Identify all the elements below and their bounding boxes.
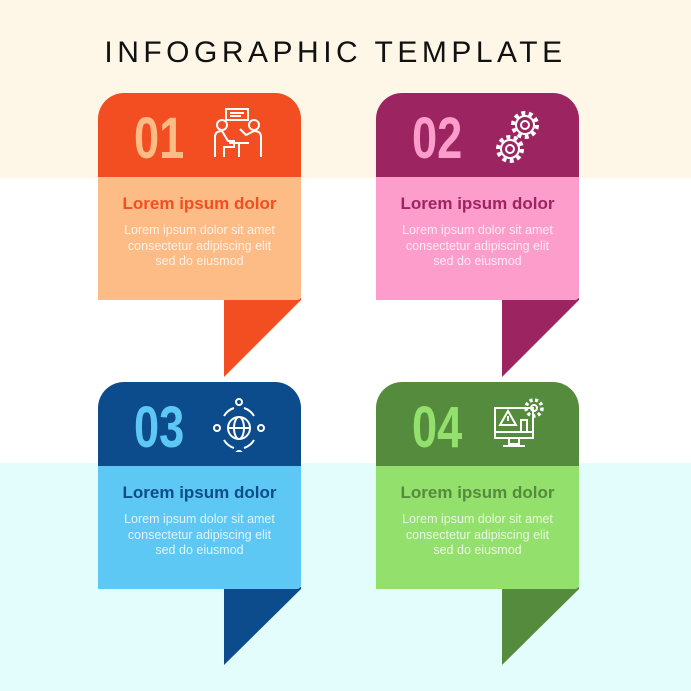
card 3 xyxy=(98,382,301,589)
card 2: consectetur adipiscing elit xyxy=(406,238,549,252)
icon: gears xyxy=(496,111,539,163)
card 1 xyxy=(98,93,301,300)
card 3: consectetur adipiscing elit xyxy=(128,528,271,542)
icon: global network xyxy=(213,398,265,452)
icon: meeting xyxy=(214,108,262,157)
card 2 xyxy=(376,93,579,300)
card 1: consectetur adipiscing elit xyxy=(128,238,271,252)
card 4: consectetur adipiscing elit xyxy=(406,528,549,542)
card 1: Lorem ipsum dolor sit amet xyxy=(124,223,275,237)
background bands xyxy=(0,0,691,178)
card 3: sed do eiusmod xyxy=(155,543,244,557)
number 01: 01 xyxy=(134,106,184,171)
card 1: Lorem ipsum dolor xyxy=(123,194,276,213)
card 4: Lorem ipsum dolor sit amet xyxy=(402,512,553,526)
card 3: Lorem ipsum dolor sit amet xyxy=(124,512,275,526)
card 2: Lorem ipsum dolor xyxy=(401,194,554,213)
card 1: sed do eiusmod xyxy=(155,254,244,268)
card 4: sed do eiusmod xyxy=(433,543,522,557)
card 2: sed do eiusmod xyxy=(433,254,522,268)
number 04: 04 xyxy=(412,395,462,460)
card 3: Lorem ipsum dolor xyxy=(123,483,276,502)
number 03: 03 xyxy=(134,395,184,460)
card 4: Lorem ipsum dolor xyxy=(401,483,554,502)
title: INFOGRAPHIC TEMPLATE xyxy=(104,36,567,69)
card 4 xyxy=(376,382,579,589)
card 2: Lorem ipsum dolor sit amet xyxy=(402,223,553,237)
icon: monitor alert gear xyxy=(494,398,544,447)
number 02: 02 xyxy=(412,106,462,171)
